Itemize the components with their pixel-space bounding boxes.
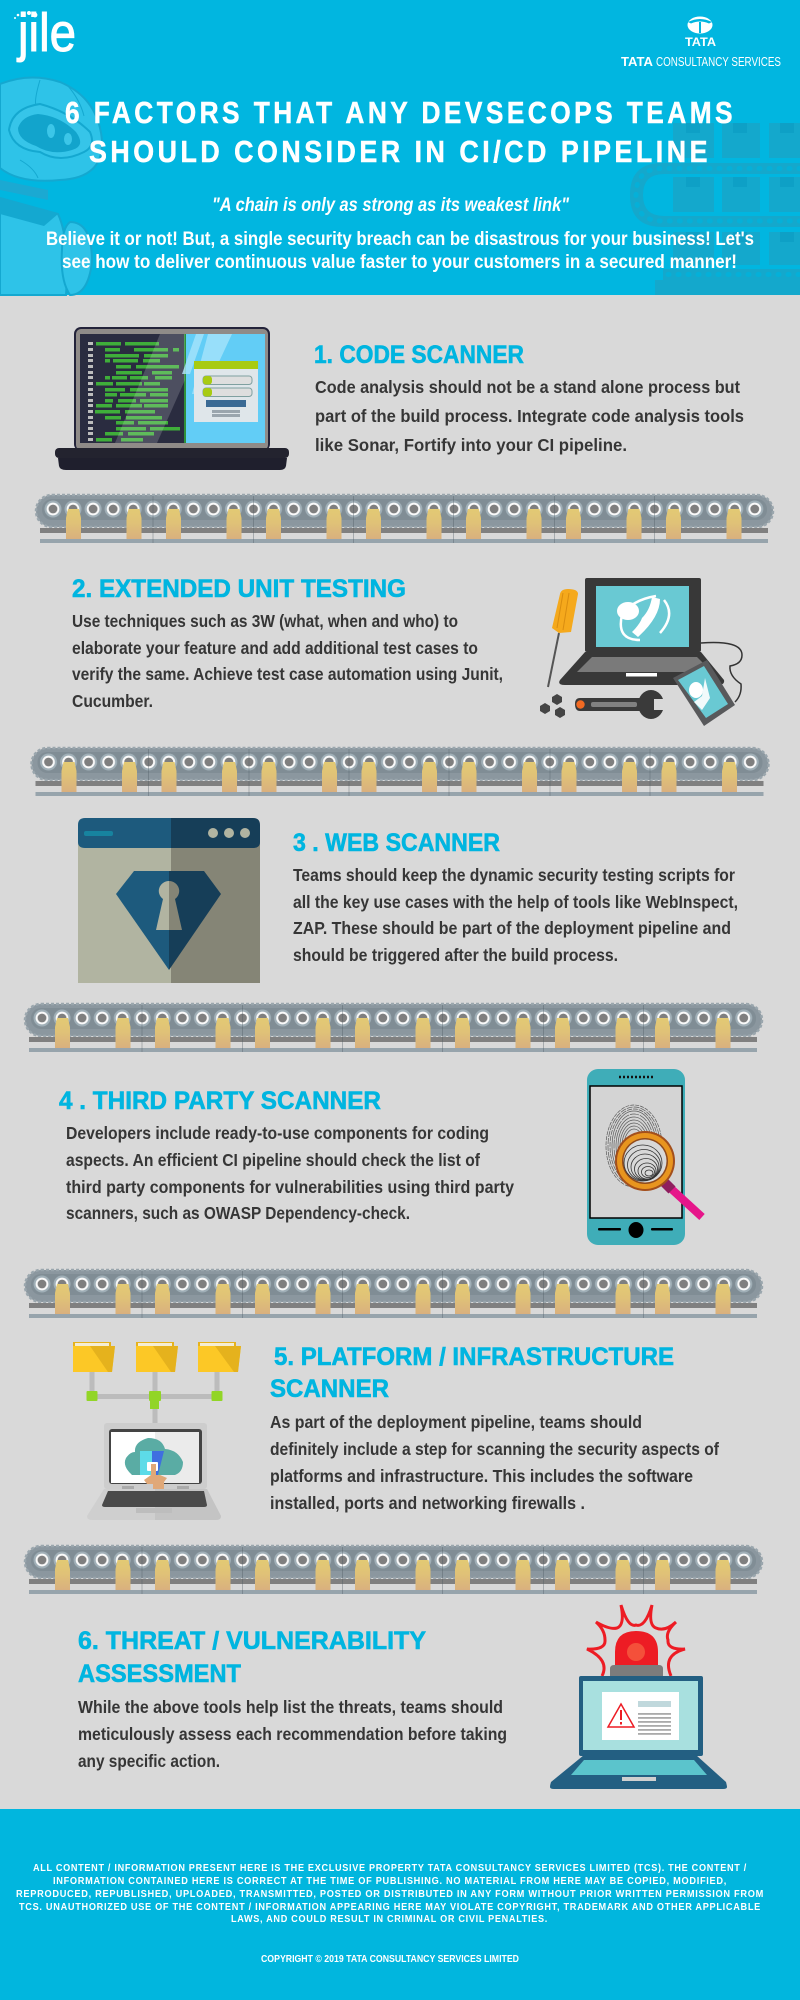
logo: Tata Consultancy Services <box>621 16 781 69</box>
body text: third party components for vulnerabilities using third party <box>66 1177 514 1197</box>
conveyor 5 <box>25 1546 762 1594</box>
body text <box>78 1697 507 1771</box>
body text: installed, ports and networking firewalls . <box>270 1493 585 1513</box>
footer <box>0 1809 800 2000</box>
conveyor 2 <box>32 748 768 796</box>
heading: SCANNER <box>270 1375 389 1403</box>
logo: Tata Consultancy Services: TATA <box>621 55 653 69</box>
section 2: extended unit testing <box>72 575 742 726</box>
body text: As part of the deployment pipeline, teams should <box>270 1412 642 1432</box>
body text: should be triggered after the build process. <box>293 945 618 965</box>
body text: Teams should keep the dynamic security testing scripts for <box>293 865 735 885</box>
body text <box>270 1412 719 1513</box>
heading: 6. THREAT / VULNERABILITY <box>78 1627 426 1655</box>
heading: 1. CODE SCANNER <box>314 341 524 369</box>
icon: phone with fingerprint and magnifier <box>587 1069 702 1245</box>
body text: ZAP. These should be part of the deployment pipeline and <box>293 918 731 938</box>
icon: laptop with code <box>55 327 289 470</box>
body text: any specific action. <box>78 1751 220 1771</box>
logo: jile: jile <box>16 3 76 63</box>
body text: all the key use cases with the help of tools like WebInspect, <box>293 892 738 912</box>
robot illustration <box>0 77 102 295</box>
body text: definitely include a step for scanning the security aspects of <box>270 1439 719 1459</box>
intro text: see how to deliver continuous value faster to your customers in a secured manner! <box>62 252 737 273</box>
title <box>65 96 736 169</box>
body text: Developers include ready-to-use components for coding <box>66 1123 489 1143</box>
quote: "A chain is only as strong as its weakest link" <box>212 195 570 216</box>
heading <box>270 1343 674 1403</box>
header banner <box>0 0 800 295</box>
body text: scanners, such as OWASP Dependency-check. <box>66 1203 410 1223</box>
heading: 5. PLATFORM / INFRASTRUCTURE <box>274 1343 674 1371</box>
body text <box>72 611 503 711</box>
legal notice: LAWS, AND COULD RESULT IN CRIMINAL OR CIVIL PENALTIES. <box>231 1913 548 1925</box>
body text: part of the build process. Integrate code analysis tools <box>315 406 744 426</box>
section 5: platform / infrastructure scanner <box>73 1342 719 1520</box>
body text <box>293 865 738 965</box>
legal notice: INFORMATION CONTAINED HERE IS CORRECT AT THE TIME OF PUBLISHING. NO MATERIAL FROM HERE MAY BE COPIED, MODIFIED, <box>53 1875 727 1887</box>
body text: meticulously assess each recommendation before taking <box>78 1724 507 1744</box>
title: SHOULD CONSIDER IN CI/CD PIPELINE <box>89 135 711 169</box>
body text: like Sonar, Fortify into your CI pipeline. <box>315 435 627 455</box>
body text: elaborate your feature and add additional test cases to <box>72 638 478 658</box>
body text: While the above tools help list the threats, teams should <box>78 1697 503 1717</box>
logo: Tata Consultancy Services: TATA <box>685 37 716 49</box>
intro text <box>46 229 754 273</box>
body text: Code analysis should not be a stand alone process but <box>315 377 740 397</box>
heading: ASSESSMENT <box>78 1660 241 1688</box>
copyright: COPYRIGHT © 2019 TATA CONSULTANCY SERVICES LIMITED <box>261 1953 519 1965</box>
section 3: web scanner <box>78 818 738 983</box>
body text: Use techniques such as 3W (what, when and who) to <box>72 611 458 631</box>
heading: 3 . WEB SCANNER <box>293 829 500 857</box>
icon: laptop, tools and phone <box>540 578 742 726</box>
body text <box>66 1123 514 1223</box>
icon: folders connected to laptop <box>73 1342 241 1520</box>
heading: 2. EXTENDED UNIT TESTING <box>72 575 406 603</box>
icon: alarm on laptop <box>550 1605 727 1789</box>
icon: browser window with shield keyhole <box>78 818 260 983</box>
body text: verify the same. Achieve test case automation using Junit, <box>72 664 503 684</box>
conveyor 4 <box>25 1270 762 1318</box>
body text: Cucumber. <box>72 691 153 711</box>
conveyor 1 <box>36 495 773 543</box>
conveyor and boxes illustration <box>630 123 800 295</box>
body text <box>315 377 744 455</box>
heading <box>78 1627 426 1688</box>
legal notice <box>16 1862 764 1925</box>
conveyor 3 <box>25 1004 762 1052</box>
body text: aspects. An efficient CI pipeline should check the list of <box>66 1150 480 1170</box>
body text: platforms and infrastructure. This includes the software <box>270 1466 693 1486</box>
section 6: threat / vulnerability assessment <box>78 1605 727 1789</box>
heading: 4 . THIRD PARTY SCANNER <box>59 1087 381 1115</box>
section 4: third party scanner <box>59 1069 702 1245</box>
section 1: code scanner <box>55 327 744 470</box>
